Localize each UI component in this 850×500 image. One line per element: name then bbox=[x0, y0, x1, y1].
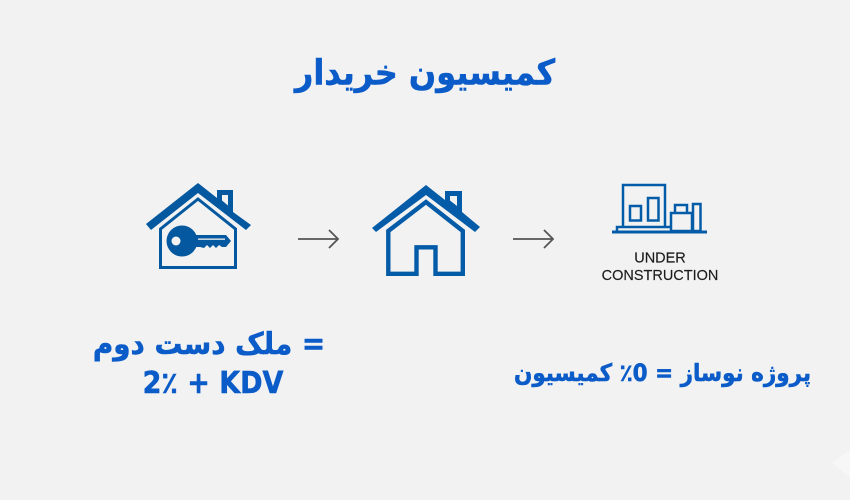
arrow 2 bbox=[513, 230, 553, 248]
text: new project commission: پروژه نوساز = 0٪ کمیسیون bbox=[514, 360, 811, 387]
icon: under construction buildings bbox=[612, 185, 707, 234]
under construction label: UNDER bbox=[634, 250, 686, 266]
under construction label: CONSTRUCTION bbox=[602, 268, 718, 284]
arrow 1 bbox=[298, 230, 338, 248]
title: کمیسیون خریدار bbox=[293, 52, 556, 94]
text: second-hand property commission bbox=[93, 326, 325, 400]
text: second-hand property commission: = ملک دست دوم bbox=[93, 326, 325, 361]
icon: house with key bbox=[146, 183, 251, 268]
text: second-hand property commission: 2٪ + KDV bbox=[143, 366, 283, 400]
under construction label bbox=[602, 250, 718, 284]
icon: house bbox=[372, 185, 480, 274]
